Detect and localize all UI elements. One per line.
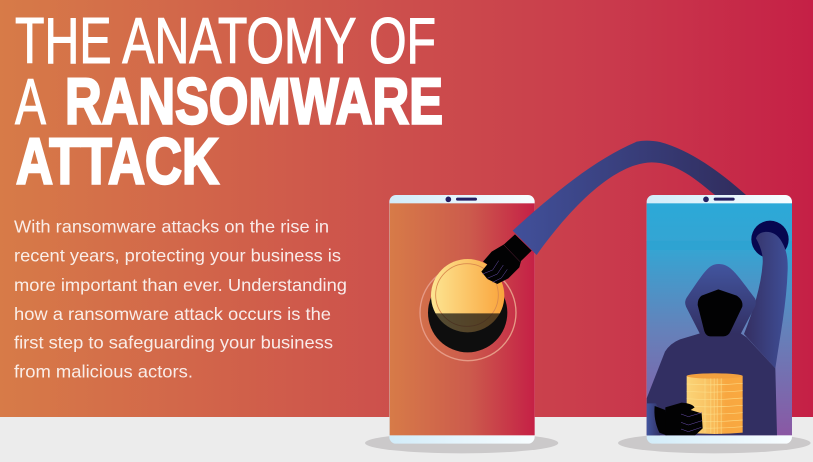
coin stack [687,373,743,434]
camera [445,196,451,202]
title: RANSOMWARE [65,64,443,138]
intro paragraph [14,217,347,382]
left phone [389,195,535,444]
hole in screen [751,221,789,258]
intro paragraph: recent years, protecting your business is [14,246,341,266]
title [15,4,443,198]
screen [390,203,535,435]
ring around hole [420,265,516,361]
raised arm [744,232,788,368]
hood [685,264,756,334]
speaker [456,198,477,201]
torso [647,333,777,435]
camera [703,196,709,202]
intro paragraph: from malicious actors. [14,362,193,382]
hacker [647,232,788,435]
phone body [647,195,792,444]
speaker [714,198,735,201]
title: ATTACK [16,124,219,198]
shadow: right phone [618,433,811,453]
arm reaching across phones [513,141,746,255]
gloved hand holding stack [654,403,703,435]
screen band [647,241,792,250]
right phone [647,195,792,444]
intro paragraph: more important than ever. Understanding [14,275,347,295]
illustration: phones and attacker [365,141,811,453]
intro paragraph: how a ransomware attack occurs is the [14,304,331,324]
hole [428,273,507,352]
floor [0,417,813,462]
intro paragraph: With ransomware attacks on the rise in [14,217,329,237]
title: THE ANATOMY OF [15,4,436,77]
intro paragraph: first step to safeguarding your business [14,333,333,353]
gloved hand holding coin [481,234,532,284]
coin [431,259,505,333]
screen [647,203,792,435]
title: A [15,65,46,138]
face [698,289,742,336]
lower sleeve [646,403,660,436]
phone body [389,195,535,444]
shadow: left phone [365,433,558,453]
